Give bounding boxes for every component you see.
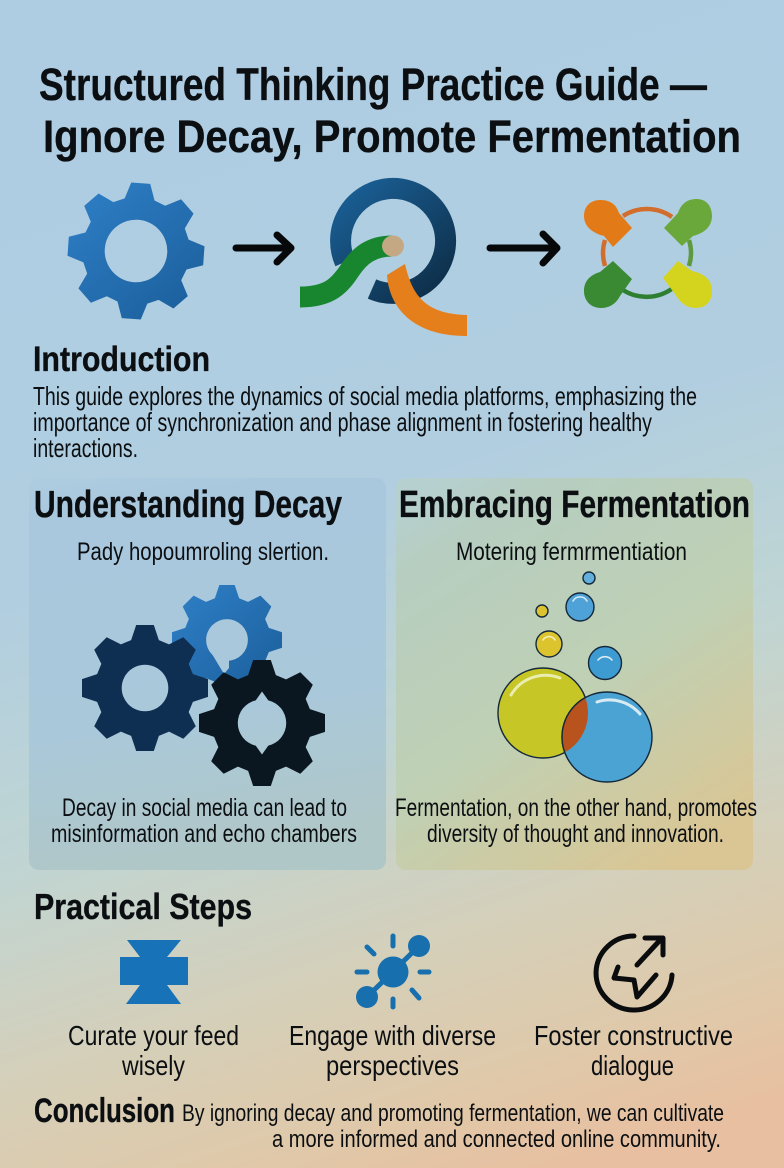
icon: blue gear [63, 178, 209, 324]
text: conclusion body [182, 1100, 724, 1153]
step: engage perspectives [289, 935, 496, 1081]
icon: blue cross shape [120, 940, 188, 1004]
text: engage with diverse perspectives [289, 1020, 496, 1081]
arrow: gear to loop [236, 235, 291, 262]
icon: connected nodes [356, 935, 430, 1008]
text: foster constructive dialogue: Foster constructive [534, 1020, 733, 1051]
text: decay description: misinformation and echo chambers [51, 820, 357, 848]
text: introduction body: interactions. [33, 433, 138, 463]
heading: practical steps: Practical Steps [34, 886, 252, 927]
heading: introduction: Introduction [33, 340, 210, 379]
panel: embracing fermentation [395, 478, 757, 870]
step: curate feed [68, 940, 239, 1081]
text: curate your feed wisely: Curate your feed [68, 1020, 239, 1051]
text: decay subtitle: Pady hopoumroling slertion. [77, 538, 329, 566]
title [39, 59, 741, 162]
icon: four-node network [584, 199, 712, 308]
panel: understanding decay [29, 478, 386, 870]
text: decay description [51, 794, 357, 848]
text: introduction body [33, 381, 697, 463]
text: fermentation description [395, 794, 757, 848]
text: decay description: Decay in social media can lead to [62, 794, 347, 822]
text: engage with diverse perspectives: Engage with diverse [289, 1020, 496, 1051]
icon: bubbles [498, 572, 652, 782]
text: foster constructive dialogue: dialogue [591, 1050, 674, 1081]
icon: circular arrow and zigzag [596, 936, 672, 1010]
icon: interlocking loop [300, 188, 467, 336]
heading: understanding decay: Understanding Decay [34, 484, 342, 526]
icon: three gears [82, 585, 325, 786]
text: fermentation subtitle: Motering fermrmentiation [456, 538, 687, 566]
text: curate your feed wisely [68, 1020, 239, 1081]
text: foster constructive dialogue [534, 1020, 733, 1081]
conclusion [34, 1092, 724, 1153]
heading: conclusion: Conclusion [34, 1092, 175, 1130]
arrow: loop to network [490, 234, 557, 263]
step: foster dialogue [534, 936, 733, 1081]
text: curate your feed wisely: wisely [121, 1050, 185, 1081]
text: engage with diverse perspectives: perspectives [326, 1050, 459, 1081]
